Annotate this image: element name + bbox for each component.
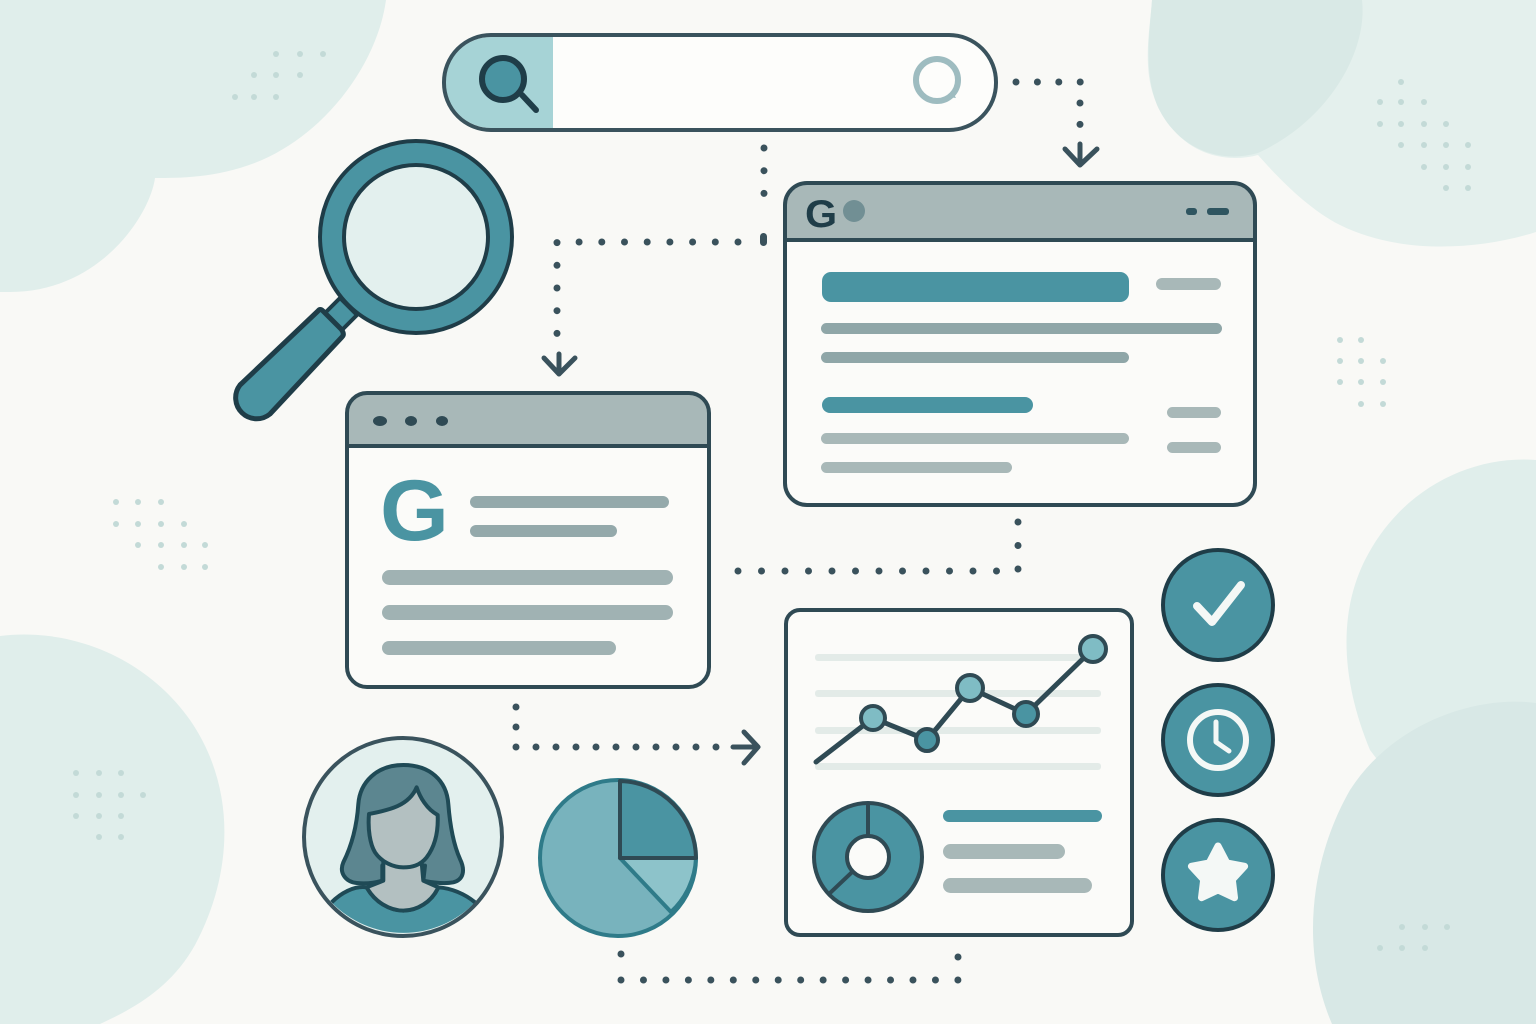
face xyxy=(369,787,438,867)
hair xyxy=(342,765,463,883)
results window: left xyxy=(347,393,709,687)
handle grip xyxy=(236,310,343,419)
line chart xyxy=(816,636,1106,762)
logo letter G: G xyxy=(380,463,449,559)
window dots xyxy=(373,416,448,426)
dotted arrow: search bar to results window xyxy=(1016,82,1097,165)
user avatar xyxy=(304,738,502,936)
lens glass xyxy=(344,165,488,309)
donut chart xyxy=(814,803,922,911)
icon: loading ring xyxy=(916,59,958,101)
dotted connector: right window to left window xyxy=(738,522,1018,571)
chart grid xyxy=(815,654,1101,770)
shoulders xyxy=(332,887,475,933)
badge: star xyxy=(1163,820,1273,930)
search bar xyxy=(444,35,996,130)
large magnifying glass xyxy=(236,141,512,419)
badge: clock xyxy=(1163,685,1273,795)
dotted connector: bottom xyxy=(621,954,958,980)
dotted arrow: left window to chart xyxy=(516,707,758,763)
window dots xyxy=(843,200,1229,222)
icon: search magnifier xyxy=(482,58,536,110)
decorative dot clusters xyxy=(73,51,1471,951)
legend lines xyxy=(943,810,1102,893)
analytics panel xyxy=(786,610,1132,935)
handle neck xyxy=(325,298,357,330)
lens ring xyxy=(320,141,512,333)
result lines xyxy=(821,272,1222,473)
pie chart xyxy=(540,780,696,936)
badge: check xyxy=(1163,550,1273,660)
neck xyxy=(367,862,438,911)
results window: right xyxy=(785,183,1255,505)
shoulders outline xyxy=(332,887,475,911)
dotted arrow: search bar to left window xyxy=(544,148,767,374)
text lines xyxy=(382,496,673,655)
logo letter G: G xyxy=(805,192,837,236)
